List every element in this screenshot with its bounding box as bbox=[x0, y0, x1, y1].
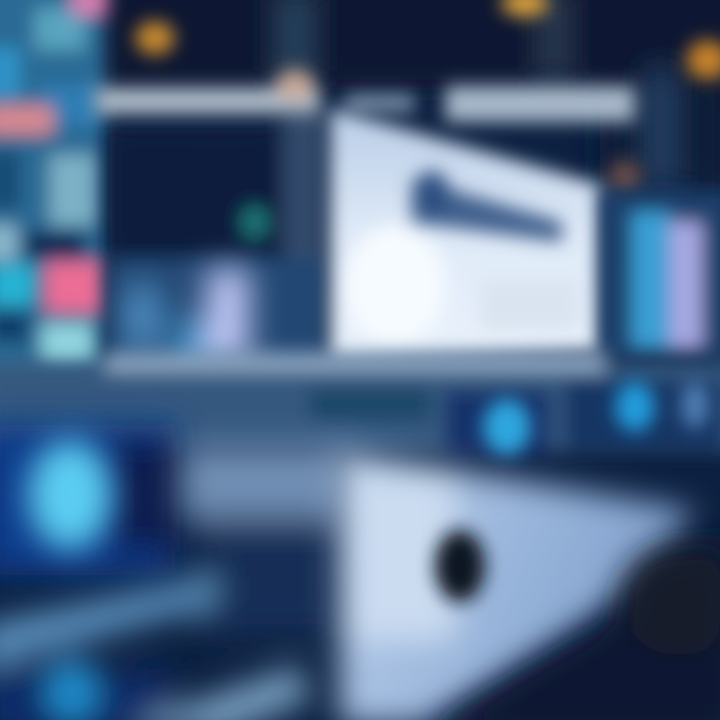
big white screen panel bbox=[330, 108, 602, 362]
middle band bbox=[0, 352, 720, 455]
lavender and blue columns bbox=[125, 268, 250, 370]
cyan star glow bbox=[28, 440, 112, 550]
bottom-right dark foreground bbox=[420, 530, 720, 720]
dark centre-left panel bbox=[110, 110, 325, 363]
top dark area bbox=[100, 0, 720, 190]
lower desk panel bbox=[338, 450, 695, 720]
blue glows in band bbox=[483, 381, 709, 455]
blurred screen text bbox=[412, 171, 562, 242]
left column of tiles bbox=[0, 0, 108, 420]
orange lights bbox=[135, 0, 720, 196]
lower-left base stripes bbox=[0, 445, 345, 720]
dark oval object bbox=[435, 530, 485, 602]
blurred banner heading bbox=[95, 69, 635, 122]
lower-left dark blue screen bbox=[0, 425, 180, 575]
right blue columns bbox=[600, 190, 720, 360]
